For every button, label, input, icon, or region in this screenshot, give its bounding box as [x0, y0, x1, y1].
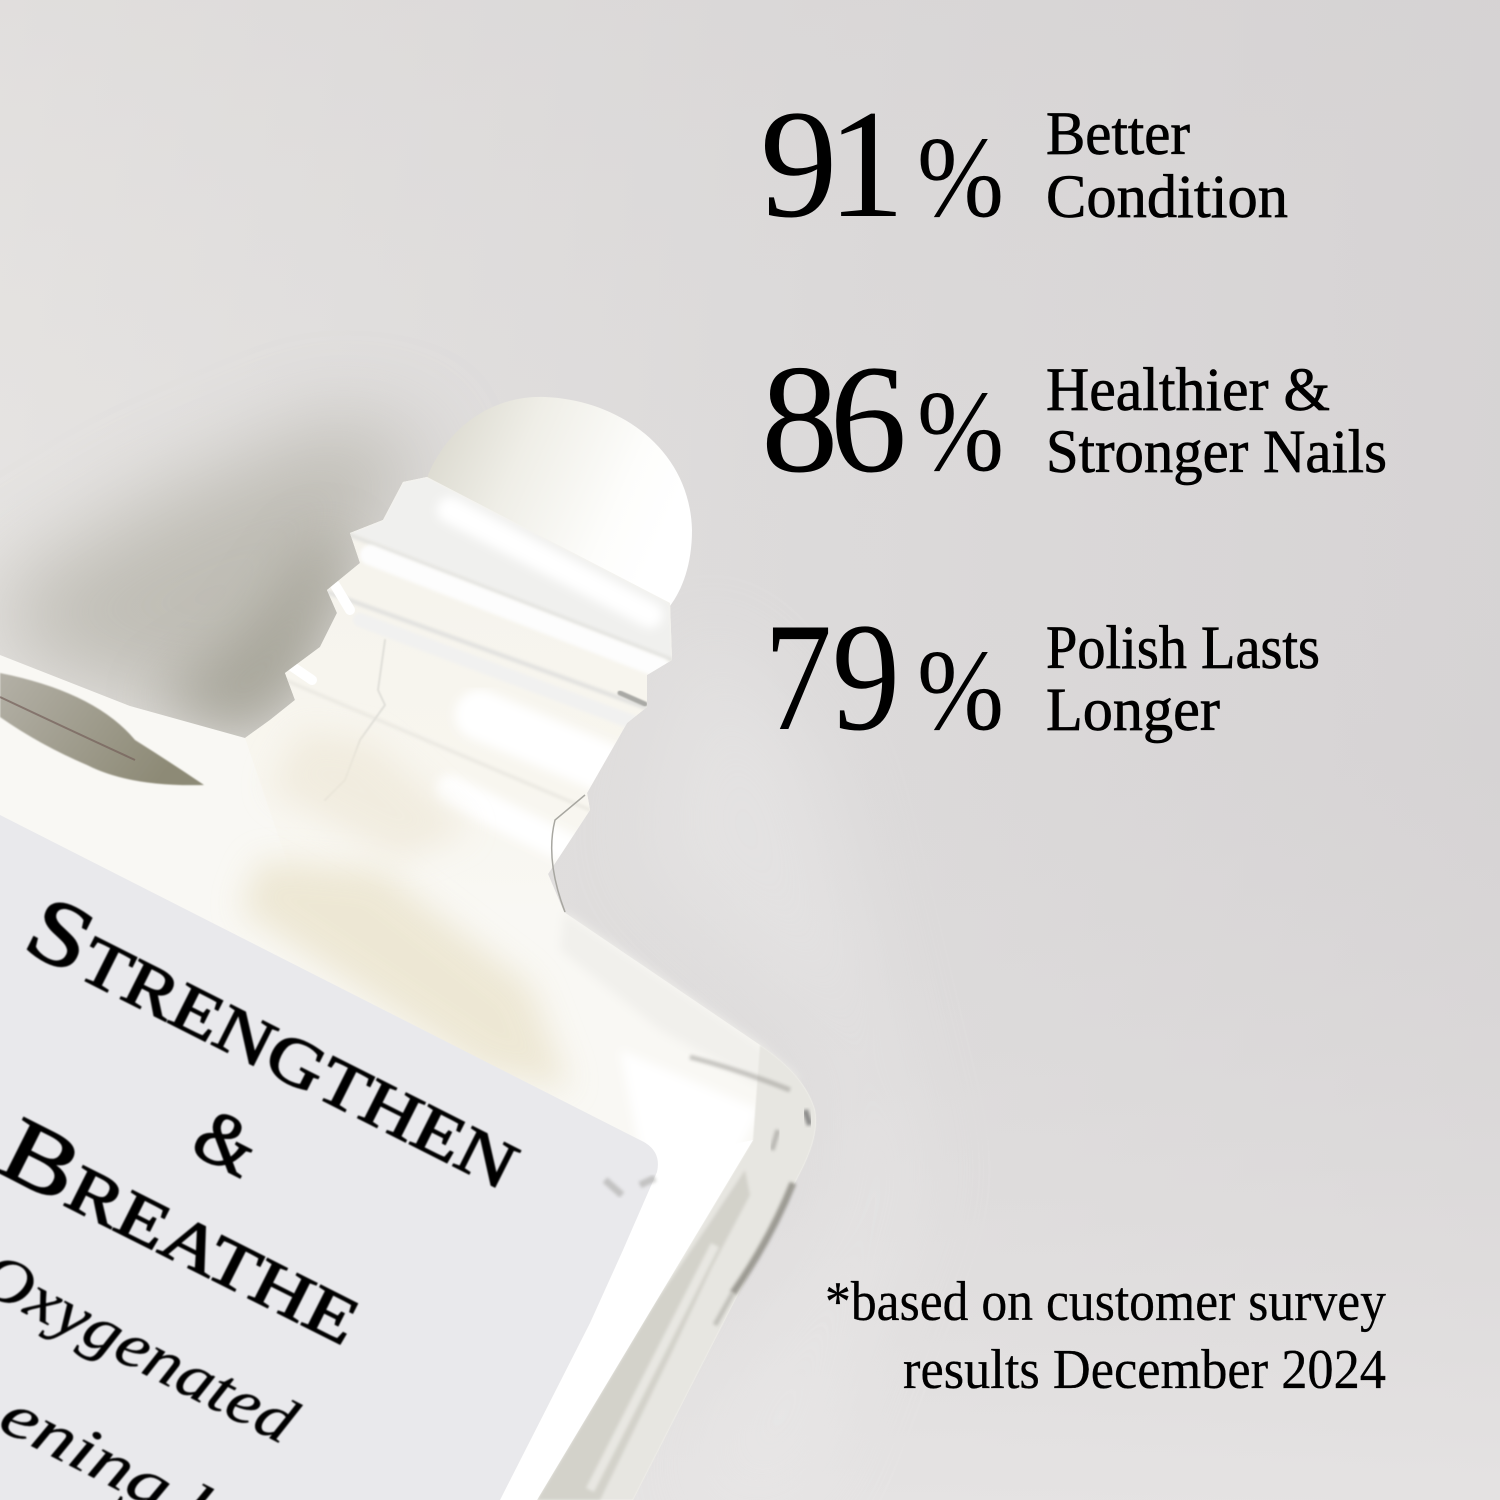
caption	[1046, 101, 1288, 231]
caption: Better	[1046, 101, 1190, 168]
label text	[0, 875, 539, 1500]
stat: 91% Better Condition	[760, 78, 1288, 250]
neck glass threads	[245, 478, 672, 861]
percent: %	[917, 627, 1004, 754]
footnote: *based on customer survey	[825, 1271, 1386, 1333]
right glass edge	[537, 1045, 816, 1500]
white strip	[500, 1140, 753, 1500]
stat: 86% Healthier & Stronger Nails	[761, 333, 1387, 505]
caption: Stronger Nails	[1046, 419, 1387, 486]
creamy liquid	[240, 860, 570, 1090]
shoulder glass	[560, 912, 800, 1085]
caption: Longer	[1046, 677, 1220, 744]
bottle body	[0, 477, 816, 1500]
roller ball	[427, 397, 692, 606]
neck base details	[552, 795, 585, 912]
footnote	[825, 1271, 1386, 1401]
label smudge	[605, 1178, 655, 1195]
number 86: 86	[761, 333, 902, 505]
caption: Healthier &	[1046, 357, 1330, 424]
bottle shadow	[0, 420, 920, 1500]
label	[0, 815, 658, 1500]
number 91: 91	[760, 78, 896, 250]
caption: Polish Lasts	[1046, 615, 1320, 682]
percent: %	[917, 114, 1004, 241]
dark reflection	[0, 673, 204, 785]
bottle	[0, 470, 816, 1500]
caption: Condition	[1046, 164, 1288, 231]
caption	[1046, 357, 1387, 486]
percent: %	[917, 368, 1004, 495]
label: Strengthen: STRENGTHEN	[11, 875, 539, 1208]
stat: 79% Polish Lasts Longer	[764, 591, 1320, 763]
caption	[1046, 615, 1320, 744]
label: ampersand: &	[181, 1092, 272, 1194]
number 79: 79	[764, 591, 900, 763]
footnote: results December 2024	[903, 1339, 1386, 1401]
